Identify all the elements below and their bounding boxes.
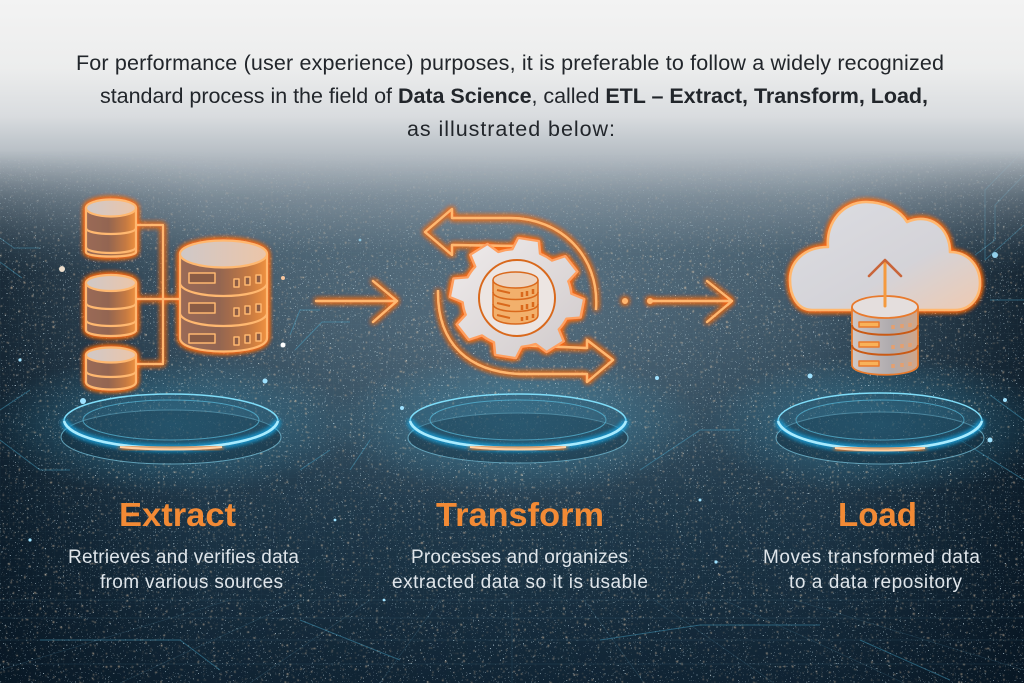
column: load bbox=[763, 496, 980, 593]
platform: transform bbox=[408, 394, 628, 463]
icon: transform gear bbox=[425, 209, 613, 382]
description: Extract: from various sources bbox=[100, 572, 283, 593]
gear inner ring bbox=[479, 260, 555, 336]
platform: load bbox=[776, 393, 984, 464]
description: Extract bbox=[68, 547, 299, 593]
icon: load cloud and database bbox=[790, 202, 980, 375]
intro line 3: as illustrated below: bbox=[407, 117, 615, 141]
description: Extract: Retrieves and verifies data bbox=[68, 547, 299, 568]
database bbox=[852, 296, 918, 375]
gear database bbox=[493, 272, 538, 324]
circular arrow top bbox=[425, 209, 596, 310]
description: Load: to a data repository bbox=[789, 572, 962, 593]
cloud bbox=[790, 202, 980, 310]
description: Load: Moves transformed data bbox=[763, 547, 980, 568]
column: transform bbox=[392, 496, 648, 593]
up arrow bbox=[869, 260, 901, 306]
description: Load bbox=[763, 547, 980, 593]
gear bbox=[450, 238, 584, 358]
arrow: extract to transform bbox=[316, 281, 397, 322]
intro paragraph bbox=[76, 51, 944, 141]
platform: extract bbox=[61, 394, 281, 464]
heading: Transform: Transform bbox=[436, 496, 604, 533]
intro line 1: For performance (user experience) purposes, it is preferable to follow a widely recognized bbox=[76, 51, 944, 75]
arrow: transform to load bbox=[623, 281, 732, 322]
column: extract bbox=[68, 496, 299, 593]
description: Transform bbox=[392, 547, 648, 593]
circular arrow bottom bbox=[438, 290, 613, 382]
heading: Extract: Extract bbox=[119, 496, 236, 533]
large database bbox=[180, 240, 267, 352]
icon: extract databases bbox=[86, 200, 267, 390]
intro line 2: standard process in the field of Data Science, called ETL – Extract, Transform, Load, bbox=[100, 84, 928, 108]
connector lines bbox=[136, 225, 180, 364]
small database 1 bbox=[86, 200, 136, 256]
description: Transform: Processes and organizes bbox=[411, 547, 628, 568]
small database 2 bbox=[86, 275, 136, 336]
small database 3 bbox=[86, 348, 136, 390]
description: Transform: extracted data so it is usable bbox=[392, 572, 648, 593]
heading: Load: Load bbox=[838, 496, 917, 533]
